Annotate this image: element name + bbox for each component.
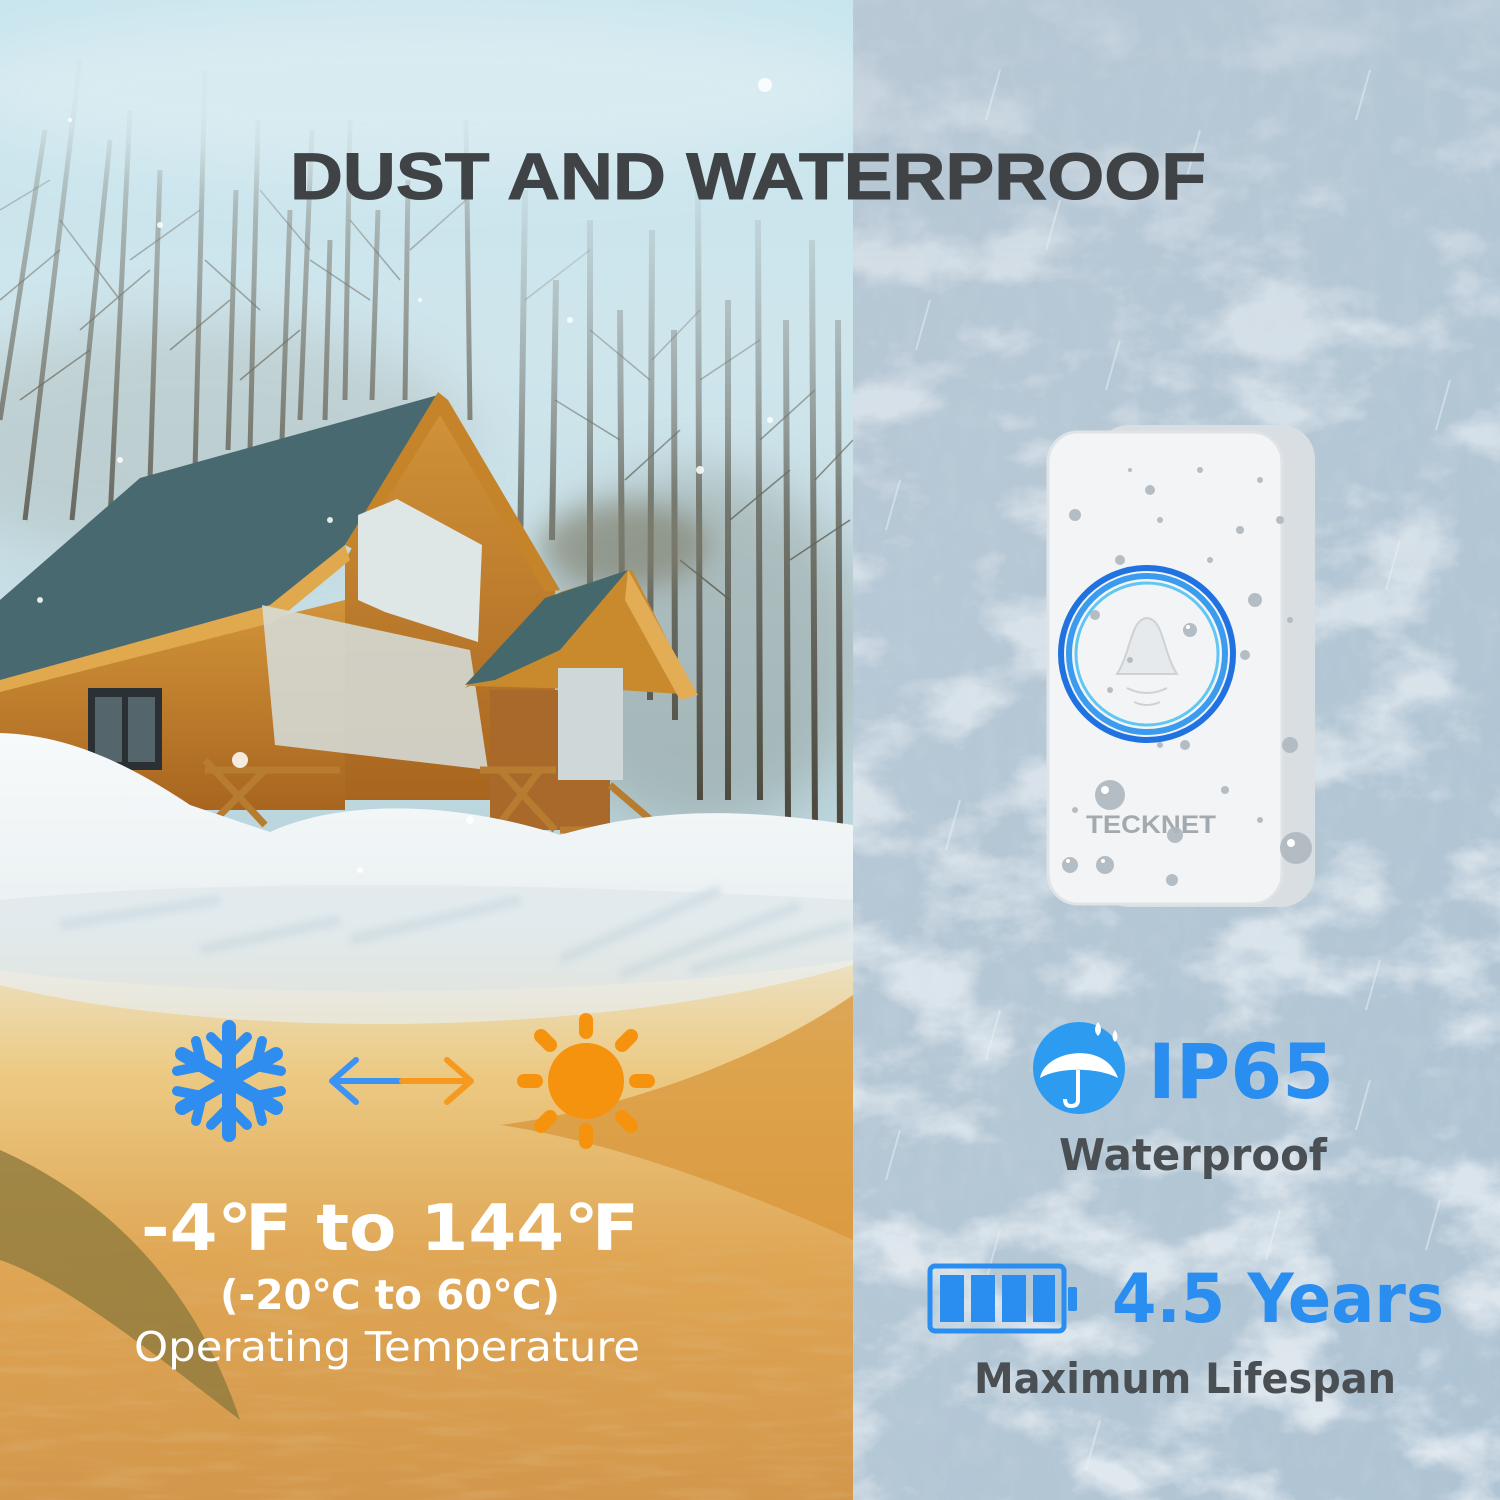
title: DUST AND WATERPROOF <box>290 139 1206 213</box>
device: doorbell button <box>1048 425 1315 907</box>
lifespan label: Maximum Lifespan <box>974 1354 1396 1403</box>
icon: sun <box>524 1020 648 1142</box>
blue ring <box>1061 568 1233 740</box>
temperature range: -4℉ to 144℉ <box>141 1192 639 1266</box>
temperature in celsius: (-20℃ to 60℃) <box>220 1271 560 1319</box>
panel: winter and desert photo <box>0 0 890 1500</box>
bare tree forest <box>0 60 870 840</box>
operating temperature label: Operating Temperature <box>134 1323 640 1371</box>
water droplets <box>1062 467 1312 886</box>
lifespan value: 4.5 Years <box>1112 1260 1444 1339</box>
snowflake specks <box>37 78 773 873</box>
arrow: cold to hot <box>332 1060 471 1102</box>
icon: umbrella badge <box>1033 1022 1125 1114</box>
icon: snowflake <box>177 1027 281 1135</box>
waterproof label: Waterproof <box>1059 1130 1328 1181</box>
panel: snowy wall <box>853 0 1500 1500</box>
bell icon <box>1117 618 1177 705</box>
snow and sand ground <box>0 733 853 1047</box>
IP65 rating: IP65 <box>1148 1027 1334 1116</box>
brand label: TECKNET <box>1086 811 1216 839</box>
house <box>0 392 698 832</box>
icon: battery <box>930 1266 1077 1331</box>
